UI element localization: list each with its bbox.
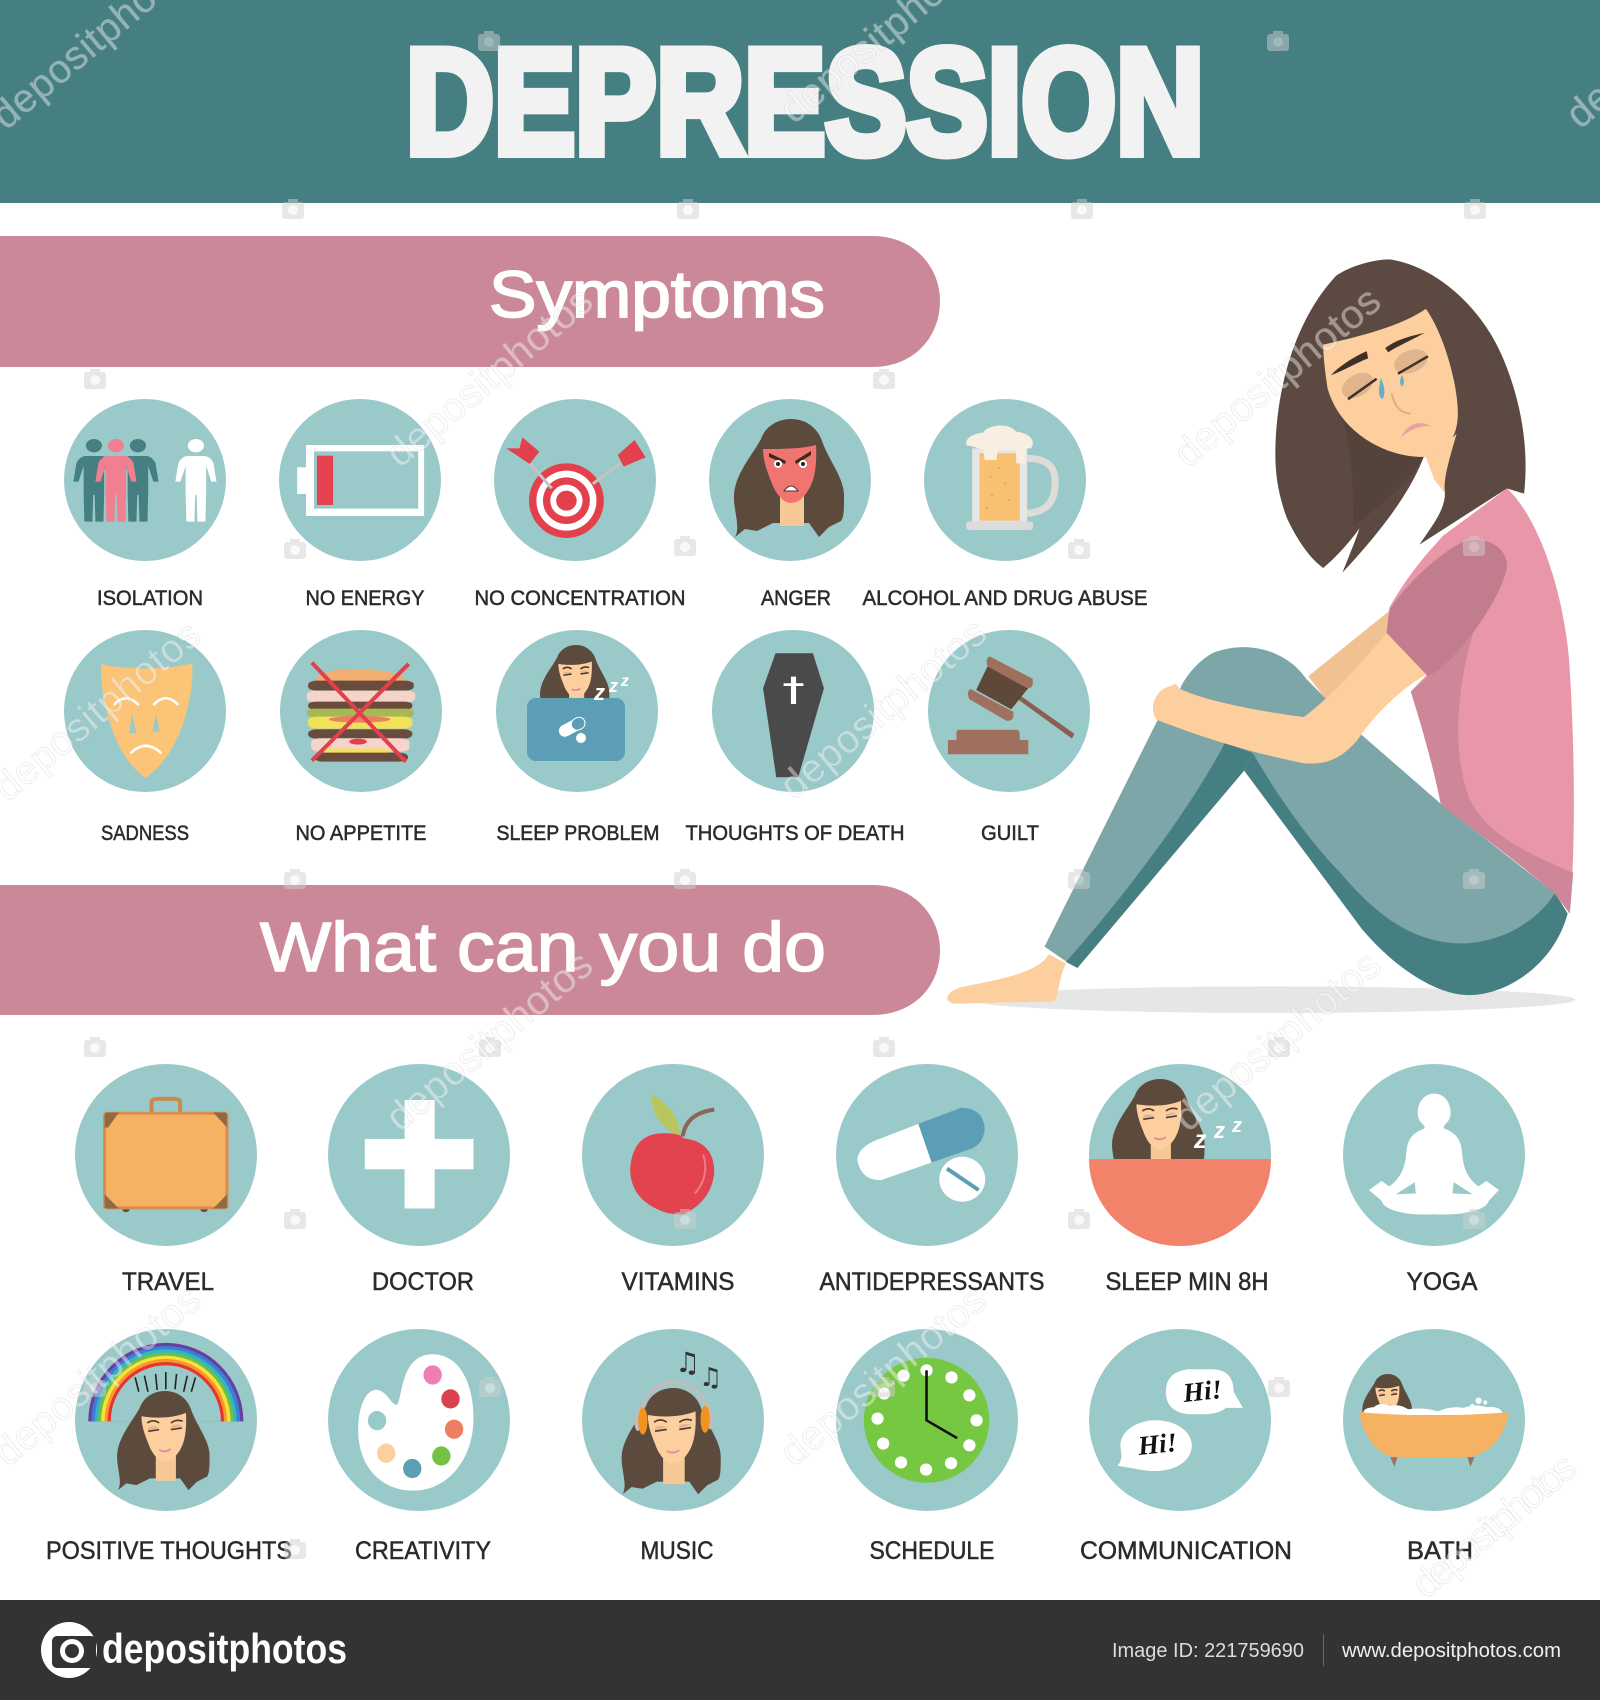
icon: sleep problem	[496, 630, 658, 792]
icon: schedule clock	[836, 1329, 1018, 1511]
icon: sleep min 8h	[1089, 1064, 1271, 1246]
panel: what can you do	[0, 885, 1525, 1565]
icon: sleep min 8h: z	[1231, 1115, 1242, 1137]
icon: communication speech bubbles	[1089, 1329, 1271, 1511]
label: anger: ANGER	[761, 587, 831, 610]
label: bath: BATH	[1407, 1537, 1473, 1565]
icon: travel suitcase	[75, 1064, 257, 1246]
footer bar	[0, 1600, 1600, 1700]
label: antidepressants: ANTIDEPRESSANTS	[820, 1268, 1044, 1296]
label: sleep min 8h: SLEEP MIN 8H	[1106, 1268, 1268, 1296]
watermark overlay: depositphotos	[378, 278, 601, 476]
icon: music headphones: ♫	[699, 1363, 722, 1393]
label: no concentration: NO CONCENTRATION	[474, 587, 686, 610]
icon: no energy battery	[279, 399, 441, 561]
icon: doctor cross	[328, 1064, 510, 1246]
icon: vitamins apple	[582, 1064, 764, 1246]
icon: beer mug	[924, 399, 1086, 561]
label: guilt: GUILT	[981, 822, 1039, 845]
website url: www.depositphotos.com	[1341, 1640, 1561, 1662]
icon: depositphotos logo	[41, 1622, 97, 1678]
icon: yoga	[1343, 1064, 1525, 1246]
icon: communication speech bubbles: Hi!	[1135, 1427, 1178, 1461]
logo wordmark: depositphotos	[102, 1625, 347, 1672]
heading bar: symptoms	[0, 236, 940, 367]
icon: no appetite burger	[280, 630, 442, 792]
label: alcohol and drug abuse: ALCOHOL AND DRUG ABUSE	[862, 587, 1148, 610]
watermark overlay: depositphotos	[378, 942, 601, 1140]
title: DEPRESSION	[406, 18, 1204, 185]
icon: music headphones	[582, 1329, 764, 1511]
watermark camera stamps	[84, 31, 1486, 1559]
panel: symptoms	[0, 236, 1148, 845]
icon: sleep problem: z	[593, 680, 605, 705]
icon: sadness mask	[64, 630, 226, 792]
icon: coffin	[712, 630, 874, 792]
label: schedule: SCHEDULE	[870, 1537, 994, 1565]
label: no appetite: NO APPETITE	[296, 822, 426, 845]
icon: isolation	[64, 399, 226, 561]
label: positive thoughts: POSITIVE THOUGHTS	[46, 1537, 292, 1565]
icon: sleep min 8h: z	[1213, 1118, 1225, 1143]
heading bar: what can you do: What can you do	[260, 908, 826, 986]
icon: bath	[1343, 1329, 1525, 1511]
icon: positive thoughts rainbow	[75, 1329, 257, 1511]
heading bar: symptoms: Symptoms	[489, 257, 825, 331]
icon: creativity palette	[328, 1329, 510, 1511]
watermark overlay: depositphotos	[772, 610, 995, 808]
icon: no concentration target	[494, 399, 656, 561]
heading bar: what can you do	[0, 885, 940, 1015]
label: creativity: CREATIVITY	[355, 1537, 491, 1565]
label: travel: TRAVEL	[122, 1268, 214, 1296]
watermark overlay: depositphotos	[1166, 942, 1389, 1140]
icon: antidepressants capsule	[836, 1064, 1018, 1246]
icon: sleep problem: z	[608, 676, 618, 696]
icon: guilt gavel	[928, 630, 1090, 792]
icon: sleep min 8h: z	[1193, 1126, 1207, 1154]
label: sadness: SADNESS	[101, 822, 189, 845]
watermark overlay: depositphotos	[1166, 278, 1389, 476]
label: music: MUSIC	[640, 1537, 714, 1565]
label: isolation: ISOLATION	[97, 587, 203, 610]
label: no energy: NO ENERGY	[306, 587, 424, 610]
label: communication: COMMUNICATION	[1080, 1537, 1292, 1565]
image id: Image ID: 221759690	[1112, 1640, 1304, 1662]
label: thoughts of death: THOUGHTS OF DEATH	[686, 822, 904, 845]
label: vitamins: VITAMINS	[622, 1268, 734, 1296]
watermark overlay: depositphotos	[772, 1277, 995, 1475]
label: yoga: YOGA	[1406, 1268, 1478, 1296]
illustration: sad woman sitting	[947, 259, 1575, 1013]
label: sleep problem: SLEEP PROBLEM	[496, 822, 660, 845]
icon: communication speech bubbles: Hi!	[1180, 1374, 1223, 1408]
icon: anger face	[709, 399, 871, 561]
icon: music headphones: ♫	[675, 1346, 700, 1379]
watermark overlay: depositphotos	[1404, 1445, 1585, 1607]
icon: sleep problem: z	[620, 673, 629, 690]
header banner	[0, 0, 1600, 203]
label: doctor: DOCTOR	[372, 1268, 474, 1296]
